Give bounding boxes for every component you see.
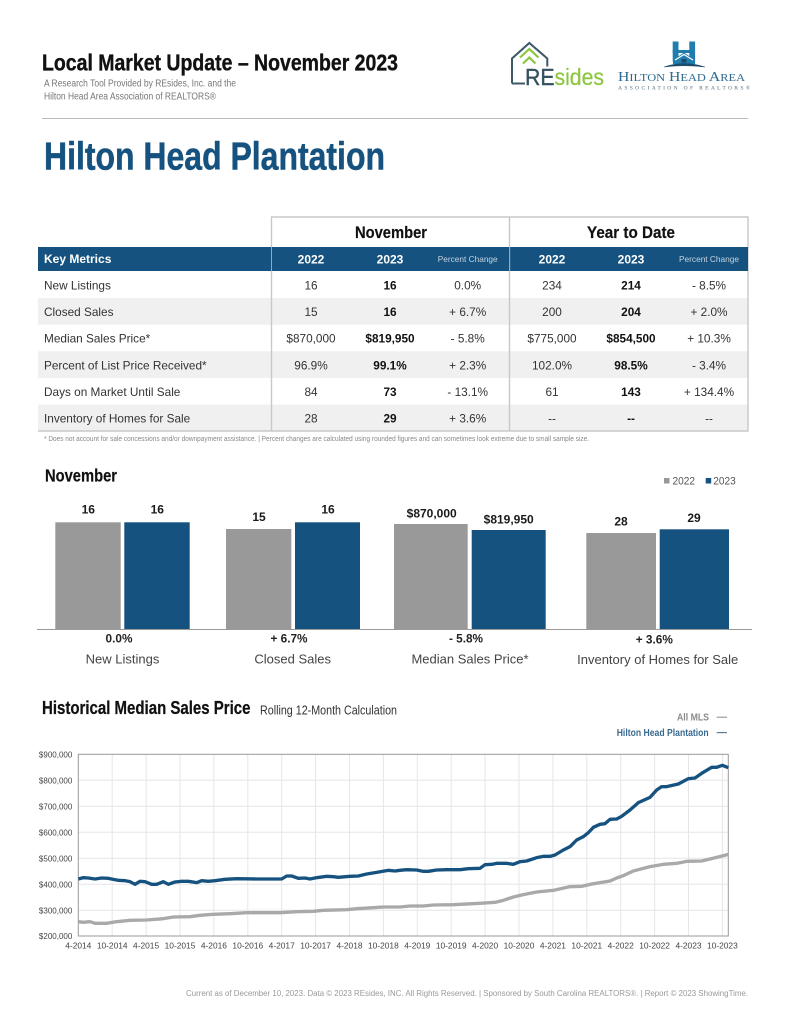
bars: Inventory of Homes for Sale: 29 [687, 511, 701, 525]
x axis labels: 10-2023 [707, 941, 738, 951]
y axis labels: $400,000 [39, 880, 73, 889]
panel: historical median sales price [39, 698, 738, 951]
y axis labels: $600,000 [39, 828, 73, 837]
y axis labels: $200,000 [39, 932, 73, 941]
row: Days on Market Until Sale: Days on Market Until Sale [44, 385, 181, 399]
line chart [39, 750, 738, 951]
table header row: Percent Change [679, 254, 739, 264]
legend: years: 2022 [672, 476, 695, 488]
row: Percent of List Price Received: 96.9% [294, 358, 328, 372]
heading: November: November [45, 466, 117, 486]
line chart legend: Hilton Head Plantation [617, 728, 709, 739]
panel: November bar chart [37, 466, 752, 667]
bars: Inventory of Homes for Sale: 28 [614, 515, 628, 529]
x axis labels: 10-2015 [165, 941, 196, 951]
line chart legend: All MLS [677, 713, 709, 724]
row: Days on Market Until Sale: + 134.4% [684, 385, 735, 399]
x axis labels: 4-2017 [269, 941, 295, 951]
title: Local Market Update – November 2023 [42, 50, 398, 76]
table header row: Percent Change [438, 254, 498, 264]
row: New Listings [44, 278, 727, 292]
legend: years [664, 476, 736, 488]
table header row: 2022 [539, 252, 566, 266]
row: Percent of List Price Received [44, 358, 727, 372]
row: New Listings: 16 [304, 278, 318, 292]
row: Percent of List Price Received: - 3.4% [692, 358, 727, 372]
x axis labels: 4-2023 [675, 941, 702, 951]
row: Days on Market Until Sale: 73 [383, 385, 397, 399]
row: Inventory of Homes for Sale: -- [548, 412, 556, 426]
bars: Closed Sales: 16 [321, 503, 335, 517]
table header row: 2022 [298, 252, 325, 266]
bars: Inventory of Homes for Sale [577, 511, 738, 667]
x axis labels: 10-2016 [232, 941, 264, 951]
row: Closed Sales: 204 [621, 305, 641, 319]
x axis labels: 4-2016 [201, 941, 227, 951]
x axis labels: 10-2020 [504, 941, 535, 951]
x axis labels: 4-2022 [608, 941, 634, 951]
row: New Listings: - 8.5% [692, 278, 727, 292]
row: Days on Market Until Sale: - 13.1% [447, 385, 489, 399]
row: New Listings: 0.0% [454, 278, 482, 292]
row: Inventory of Homes for Sale [44, 412, 713, 426]
row: Inventory of Homes for Sale: + 3.6% [449, 412, 487, 426]
bars: New Listings: 16 [82, 503, 95, 517]
row: Days on Market Until Sale: 143 [621, 385, 641, 399]
row: Inventory of Homes for Sale: 29 [383, 412, 397, 426]
bars: Closed Sales: 15 [252, 510, 266, 524]
x axis labels: 10-2021 [571, 941, 603, 951]
y axis labels: $700,000 [39, 802, 73, 811]
heading: Historical Median Sales Price: Historical Median Sales Price [42, 698, 250, 718]
bars: New Listings: 0.0% [106, 632, 133, 646]
x axis labels: 10-2017 [300, 941, 331, 951]
y axis labels: $800,000 [39, 776, 73, 785]
table header row: 2023 [377, 252, 404, 266]
bars: Median Sales Price: $819,950 [484, 512, 534, 526]
line chart legend [617, 713, 727, 739]
row: New Listings: 214 [621, 278, 641, 292]
bars: Closed Sales [226, 503, 360, 666]
header title block [42, 50, 398, 102]
row: Closed Sales: + 2.0% [690, 305, 728, 319]
x axis labels: 4-2018 [336, 941, 363, 951]
row: Median Sales Price: $775,000 [527, 332, 577, 346]
row: Closed Sales [44, 305, 728, 319]
row: Inventory of Homes for Sale: Inventory of Homes for Sale [44, 412, 191, 426]
key metrics table [38, 217, 748, 431]
x axis labels: 10-2019 [436, 941, 467, 951]
row: Percent of List Price Received: + 2.3% [449, 358, 487, 372]
row: Percent of List Price Received: 102.0% [532, 358, 573, 372]
bars: Inventory of Homes for Sale: Inventory of Homes for Sale [577, 652, 738, 667]
logo: Hilton Head Area Association of Realtors: ASSOCIATION OF REALTORS® [618, 84, 751, 92]
table group headers [355, 223, 675, 242]
logo: Hilton Head Area Association of Realtors [618, 42, 751, 92]
bars: Median Sales Price: - 5.8% [449, 632, 484, 646]
x axis labels: 4-2020 [472, 941, 498, 951]
x axis labels [65, 941, 738, 951]
bars: Median Sales Price [394, 506, 546, 666]
x axis labels: 4-2014 [65, 941, 92, 951]
logo: REsides: REsides [525, 64, 604, 90]
row: New Listings: 234 [542, 278, 562, 292]
bars: Median Sales Price: $870,000 [407, 506, 457, 520]
y axis labels: $300,000 [39, 906, 73, 915]
y axis labels: $500,000 [39, 854, 73, 863]
logo: Hilton Head Area Association of Realtors: HILTON HEAD AREA [618, 70, 745, 85]
location heading: Hilton Head Plantation [44, 136, 385, 178]
row: Inventory of Homes for Sale: -- [627, 412, 635, 426]
x axis labels: 10-2018 [368, 941, 399, 951]
row: Median Sales Price: $854,500 [606, 332, 656, 346]
row: Percent of List Price Received: 98.5% [614, 358, 648, 372]
row: Inventory of Homes for Sale: 28 [304, 412, 318, 426]
bars: New Listings [55, 503, 190, 666]
row: New Listings: 16 [383, 278, 397, 292]
subtitle: Hilton Head Area Association of REALTORS® [44, 92, 217, 102]
subtitle: A Research Tool Provided by REsides, Inc. and the [44, 78, 236, 90]
footer: Current as of December 10, 2023. Data © 2023 REsides, INC. All Rights Reserved. | Sponsored by South Carolina REALTORS®. | Report © 2023 ShowingTime. [186, 989, 748, 998]
y axis labels [39, 750, 73, 941]
row: Median Sales Price: $870,000 [286, 332, 336, 346]
table header row: Key Metrics [44, 252, 112, 266]
row: New Listings: New Listings [44, 278, 111, 292]
legend: years: 2023 [713, 476, 736, 488]
bars: Closed Sales: Closed Sales [254, 652, 331, 666]
x axis labels: 4-2019 [404, 941, 431, 951]
bars: New Listings: 16 [151, 503, 164, 517]
table header row [38, 247, 748, 271]
row: Closed Sales: Closed Sales [44, 305, 114, 319]
row: Percent of List Price Received: 99.1% [373, 358, 407, 372]
row: Inventory of Homes for Sale: -- [705, 412, 713, 426]
row: Days on Market Until Sale: 61 [545, 385, 559, 399]
row: Closed Sales: 16 [383, 305, 397, 319]
bars: Closed Sales: + 6.7% [270, 632, 308, 646]
table group headers: Year to Date [587, 223, 675, 242]
row: Median Sales Price [44, 332, 731, 346]
subtitle [44, 78, 236, 102]
x axis labels: 10-2014 [97, 941, 128, 951]
series: Hilton Head Plantation [78, 765, 728, 884]
row: Median Sales Price: Median Sales Price* [44, 332, 151, 346]
row: Closed Sales: 15 [304, 305, 318, 319]
x axis labels: 4-2015 [133, 941, 159, 951]
row: Median Sales Price: + 10.3% [687, 332, 731, 346]
bars: Inventory of Homes for Sale: + 3.6% [636, 632, 673, 646]
bars: New Listings: New Listings [86, 652, 160, 666]
table header row: 2023 [618, 252, 645, 266]
row: Median Sales Price: $819,950 [365, 332, 415, 346]
table footnote: * Does not account for sale concessions and/or downpayment assistance. | Percent changes are calculated using rounded figures and can sometimes look extreme due to small sample size. [44, 436, 589, 443]
series: All MLS [78, 854, 728, 923]
table group headers: November [355, 223, 427, 242]
row: Days on Market Until Sale [44, 385, 735, 399]
row: Median Sales Price: - 5.8% [451, 332, 485, 346]
subheading: Rolling 12-Month Calculation [260, 703, 397, 717]
x axis labels: 4-2021 [540, 941, 566, 951]
row: Percent of List Price Received: Percent of List Price Received* [44, 358, 207, 372]
y axis labels: $900,000 [39, 750, 73, 759]
logo: REsides [512, 43, 604, 90]
row: Closed Sales: 200 [542, 305, 562, 319]
bars: Median Sales Price: Median Sales Price* [411, 652, 529, 666]
row: Days on Market Until Sale: 84 [304, 385, 318, 399]
row: Closed Sales: + 6.7% [449, 305, 487, 319]
x axis labels: 10-2022 [639, 941, 670, 951]
